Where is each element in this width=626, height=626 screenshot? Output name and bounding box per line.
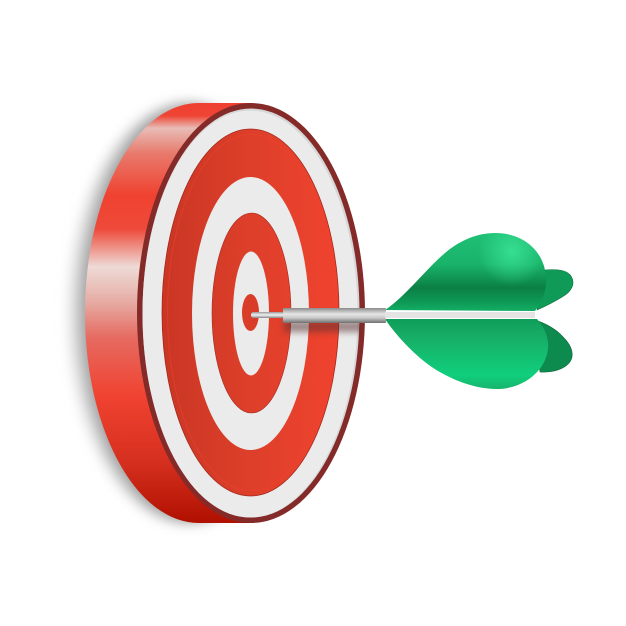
upper fin xyxy=(385,233,546,311)
bullseye xyxy=(242,294,259,331)
lower fin xyxy=(385,319,548,389)
outer rim xyxy=(137,103,365,523)
cast shadow of target xyxy=(70,105,298,521)
needle tip xyxy=(251,312,284,318)
middle white ring xyxy=(192,177,309,450)
inner white ring xyxy=(233,252,269,376)
dart shaft xyxy=(251,308,535,323)
white spine between fins xyxy=(385,312,535,318)
target face xyxy=(137,103,365,523)
upper back fin xyxy=(537,270,573,310)
inner red ring xyxy=(212,213,291,413)
outer red ring xyxy=(162,129,339,496)
outer white ring xyxy=(142,108,360,518)
lower back fin xyxy=(535,320,572,372)
metal barrel xyxy=(283,308,386,323)
illustration: dart hitting target xyxy=(64,96,574,530)
back fletching xyxy=(535,270,573,372)
shaft shadow on target xyxy=(284,321,366,332)
target side wall xyxy=(85,103,251,523)
